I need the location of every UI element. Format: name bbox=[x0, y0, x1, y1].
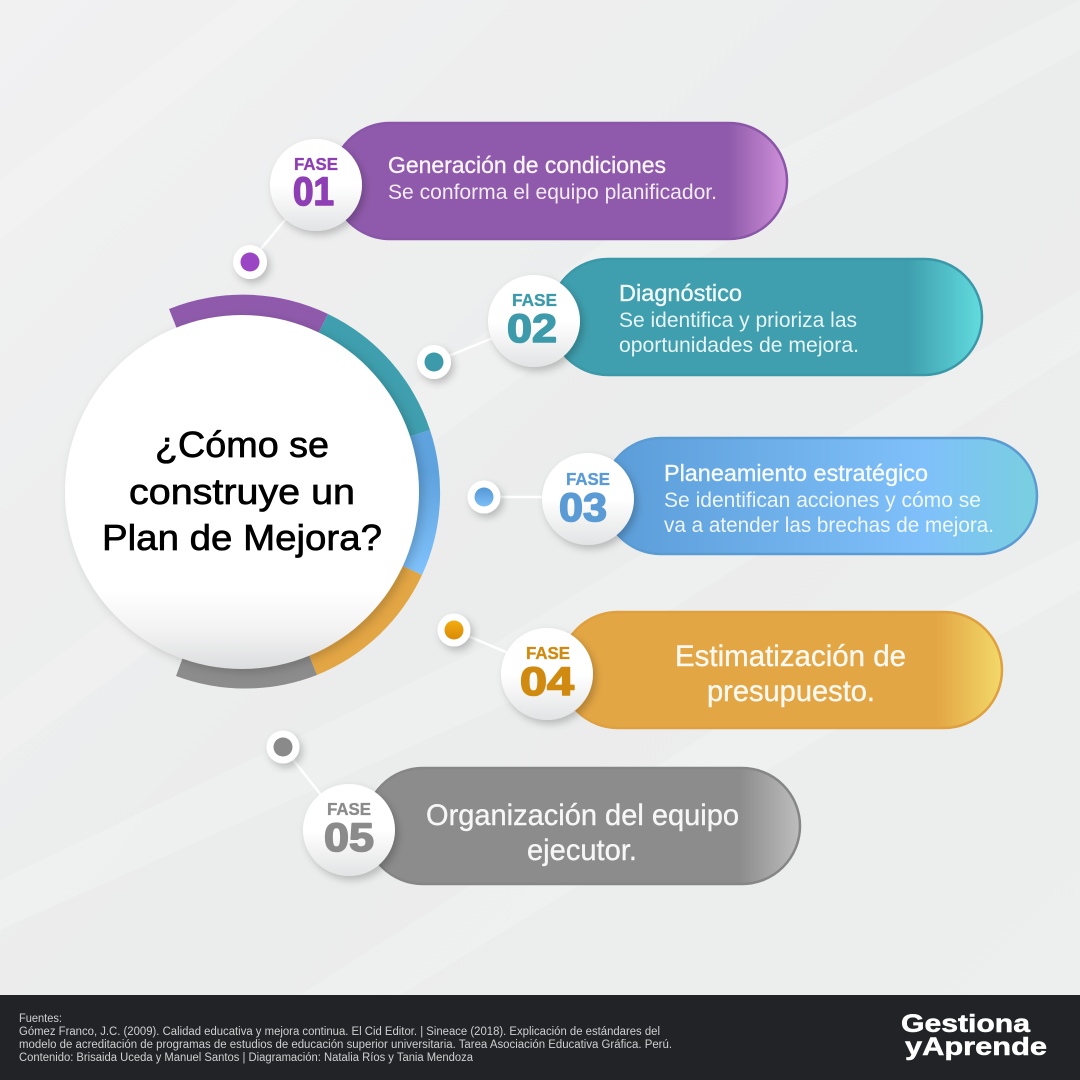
text: fase 04: presupuesto. bbox=[707, 675, 875, 708]
text: fase 04: Estimatización de bbox=[675, 640, 906, 673]
text: fase 05: ejecutor. bbox=[527, 834, 637, 867]
text: fase 03 bbox=[664, 460, 994, 537]
badge: fase 02: FASE bbox=[512, 290, 557, 310]
badge: fase 05 bbox=[303, 784, 395, 876]
text: fase 02: oportunidades de mejora. bbox=[619, 333, 859, 357]
badge: fase 01 bbox=[270, 139, 362, 231]
text: fase 02: Diagnóstico bbox=[619, 280, 742, 306]
text: fase 01: Se conforma el equipo planificador. bbox=[388, 180, 717, 204]
sources text: Contenido: Brisaida Uceda y Manuel Santos | Diagramación: Natalia Ríos y Tania Mendoza bbox=[19, 1052, 474, 1064]
text: fase 03: Se identifican acciones y cómo se bbox=[664, 488, 981, 512]
text: fase 03: Planeamiento estratégico bbox=[664, 460, 928, 486]
badge: fase 01: 01 bbox=[293, 170, 334, 214]
text: fase 02 bbox=[619, 280, 859, 357]
badge: fase 03: FASE bbox=[566, 469, 610, 489]
badge: fase 05: 05 bbox=[324, 816, 374, 860]
badge: fase 04 bbox=[501, 628, 593, 720]
sources text: modelo de acreditación de programas de estudios de educación superior universitaria. Tarea Asociación Educativa Gráfica. Perú. bbox=[19, 1039, 672, 1051]
central circle bbox=[65, 315, 419, 669]
pill: fase 01 bbox=[332, 123, 787, 239]
text: fase 03: va a atender las brechas de mejora. bbox=[664, 513, 994, 537]
footer band bbox=[0, 995, 1080, 1080]
sources text: Gómez Franco, J.C. (2009). Calidad educativa y mejora continua. El Cid Editor. | Sineace (2018). Explicación de estándares del bbox=[19, 1026, 660, 1038]
text: fase 01 bbox=[388, 152, 717, 204]
heading bbox=[102, 424, 382, 558]
text: fase 04 bbox=[675, 640, 906, 708]
text: fase 02: Se identifica y prioriza las bbox=[619, 308, 857, 332]
badge: fase 04: FASE bbox=[526, 643, 570, 663]
logo: Gestiona bbox=[901, 1010, 1031, 1038]
ring: five coloured segments bbox=[169, 295, 440, 689]
badge: fase 05: FASE bbox=[327, 799, 371, 819]
dot: fase 03 bbox=[468, 480, 500, 514]
text: fase 05: Organización del equipo bbox=[426, 799, 739, 832]
dot: fase 05 bbox=[266, 730, 300, 764]
logo: yAprende bbox=[905, 1033, 1047, 1061]
pill: fase 04 bbox=[560, 612, 1002, 728]
badge: fase 02: 02 bbox=[507, 307, 557, 351]
text: fase 01: Generación de condiciones bbox=[388, 152, 666, 178]
badge: fase 03 bbox=[542, 453, 634, 545]
heading: construye un bbox=[129, 471, 355, 512]
sources text bbox=[19, 1013, 672, 1064]
pill: fase 05 bbox=[365, 768, 800, 884]
text: fase 05 bbox=[426, 799, 739, 867]
connector lines bbox=[250, 214, 550, 800]
badge: fase 01: FASE bbox=[294, 154, 338, 174]
badge: fase 03: 03 bbox=[559, 486, 607, 530]
pill: fase 02 bbox=[550, 259, 982, 375]
heading: ¿Cómo se bbox=[155, 424, 329, 465]
badge: fase 04: 04 bbox=[520, 660, 575, 704]
dot: fase 01 bbox=[233, 245, 267, 279]
pill: fase 03 bbox=[603, 438, 1037, 554]
sources text: Fuentes: bbox=[19, 1013, 62, 1025]
dot: fase 02 bbox=[417, 345, 451, 379]
heading: Plan de Mejora? bbox=[102, 517, 382, 558]
badge: fase 02 bbox=[488, 275, 580, 367]
logo bbox=[901, 1010, 1047, 1061]
dot: fase 04 bbox=[438, 614, 470, 646]
